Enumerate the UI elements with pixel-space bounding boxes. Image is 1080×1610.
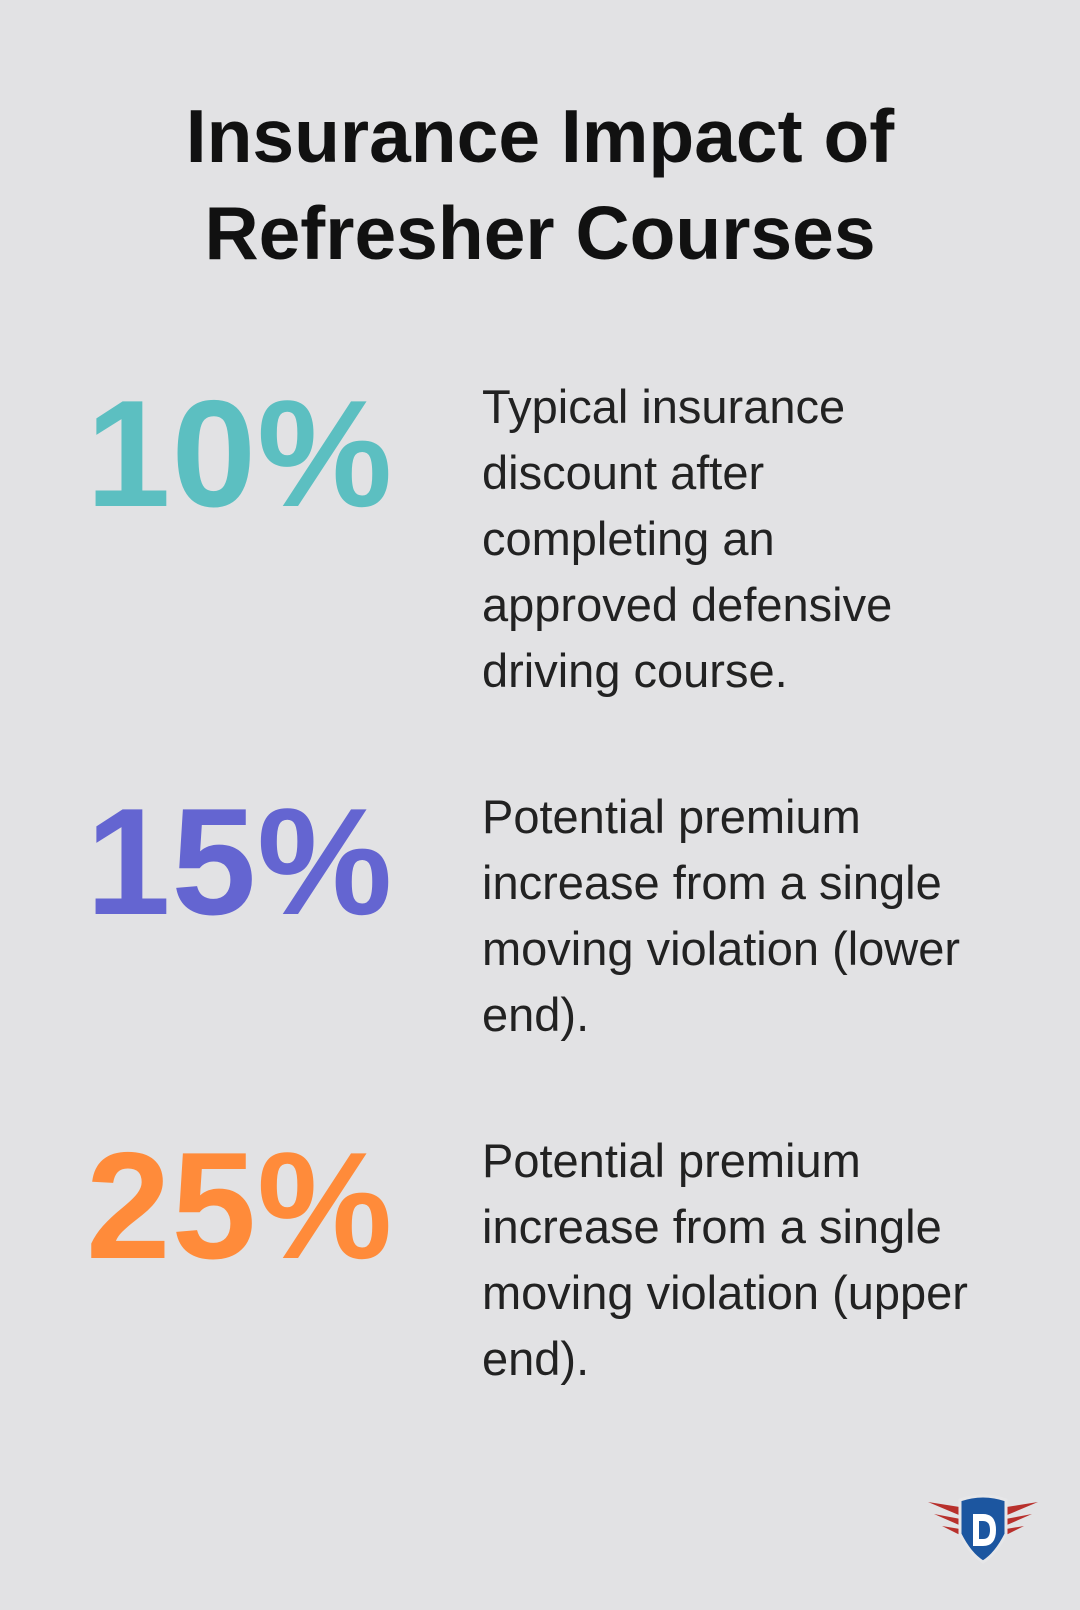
text: 15% description: end). bbox=[482, 988, 589, 1041]
text: 10% description bbox=[482, 380, 892, 697]
text: 15% description: Potential premium bbox=[482, 790, 861, 843]
text: 10% description: approved defensive bbox=[482, 578, 892, 631]
text: 10% description: driving course. bbox=[482, 644, 788, 697]
stat: 25%: 25% bbox=[86, 1121, 393, 1291]
text: 10% description: Typical insurance bbox=[482, 380, 845, 433]
text: 25% description: increase from a single bbox=[482, 1200, 942, 1253]
stat: 10%: 10% bbox=[86, 369, 393, 539]
text: 15% description: moving violation (lower bbox=[482, 922, 960, 975]
text: 25% description: moving violation (upper bbox=[482, 1266, 968, 1319]
text: 10% description: completing an bbox=[482, 512, 775, 565]
title: Refresher Courses bbox=[204, 191, 876, 275]
text: 10% description: discount after bbox=[482, 446, 764, 499]
title bbox=[186, 94, 894, 275]
text: 25% description bbox=[482, 1134, 968, 1385]
stat: 15%: 15% bbox=[86, 777, 393, 947]
title: Insurance Impact of bbox=[186, 94, 894, 178]
text: 25% description: Potential premium bbox=[482, 1134, 861, 1187]
text: 25% description: end). bbox=[482, 1332, 589, 1385]
icon: logo shield bbox=[928, 1498, 1038, 1560]
text: 15% description bbox=[482, 790, 960, 1041]
text: 15% description: increase from a single bbox=[482, 856, 942, 909]
